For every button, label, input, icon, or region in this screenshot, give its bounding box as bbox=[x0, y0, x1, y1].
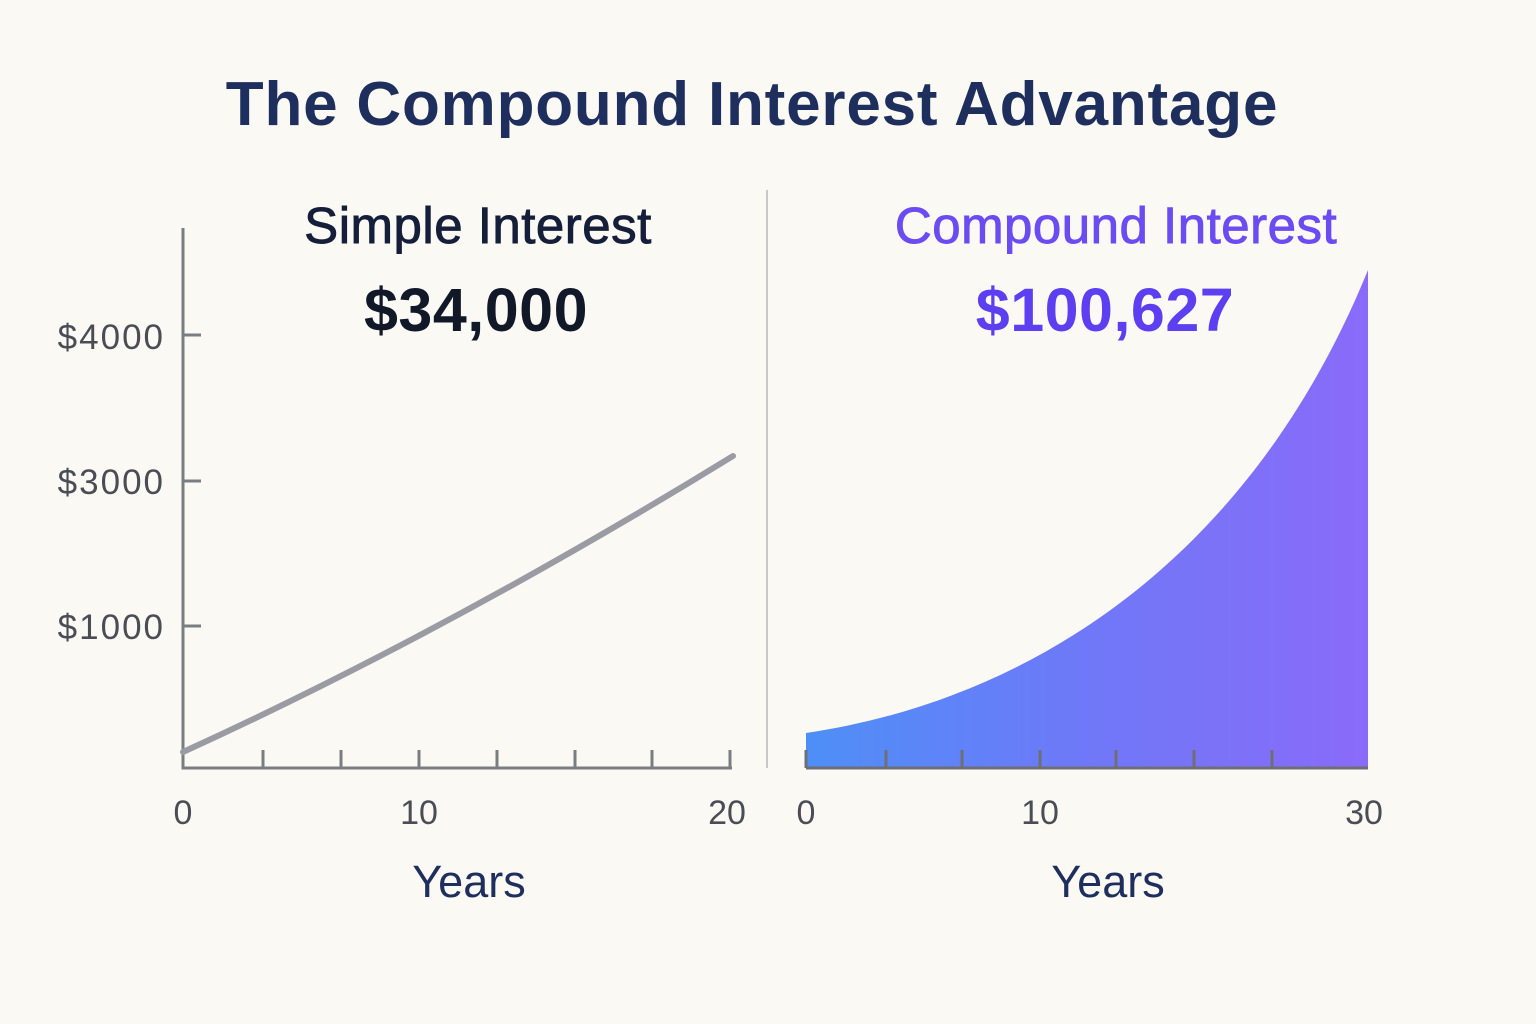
value: compound total: $100,627 bbox=[976, 276, 1234, 344]
heading: compound interest: Compound Interest bbox=[895, 197, 1337, 254]
area chart: compound growth bbox=[806, 270, 1368, 768]
x axis labels bbox=[174, 794, 746, 832]
x axis title: Years bbox=[1051, 856, 1165, 907]
panel: simple interest bbox=[58, 197, 746, 907]
line: simple growth bbox=[183, 456, 733, 752]
x axis labels: 20 bbox=[708, 794, 746, 832]
x axis labels: 10 bbox=[1021, 794, 1059, 832]
value: simple total: $34,000 bbox=[364, 276, 588, 344]
axis bbox=[806, 750, 1368, 768]
y axis labels bbox=[58, 318, 165, 647]
y axis labels: $1000 bbox=[58, 608, 165, 647]
heading: simple interest: Simple Interest bbox=[304, 197, 652, 254]
x axis labels: 0 bbox=[174, 794, 192, 832]
x axis labels: 10 bbox=[400, 794, 438, 832]
divider bbox=[766, 190, 768, 768]
x axis labels: 0 bbox=[797, 794, 815, 832]
axes bbox=[183, 228, 732, 768]
panel: compound interest bbox=[797, 197, 1383, 907]
x axis labels bbox=[797, 794, 1383, 832]
x axis title: Years bbox=[412, 856, 526, 907]
y axis labels: $4000 bbox=[58, 318, 165, 357]
x axis labels: 30 bbox=[1345, 794, 1383, 832]
title: The Compound Interest Advantage bbox=[226, 70, 1278, 139]
y axis labels: $3000 bbox=[58, 463, 165, 502]
